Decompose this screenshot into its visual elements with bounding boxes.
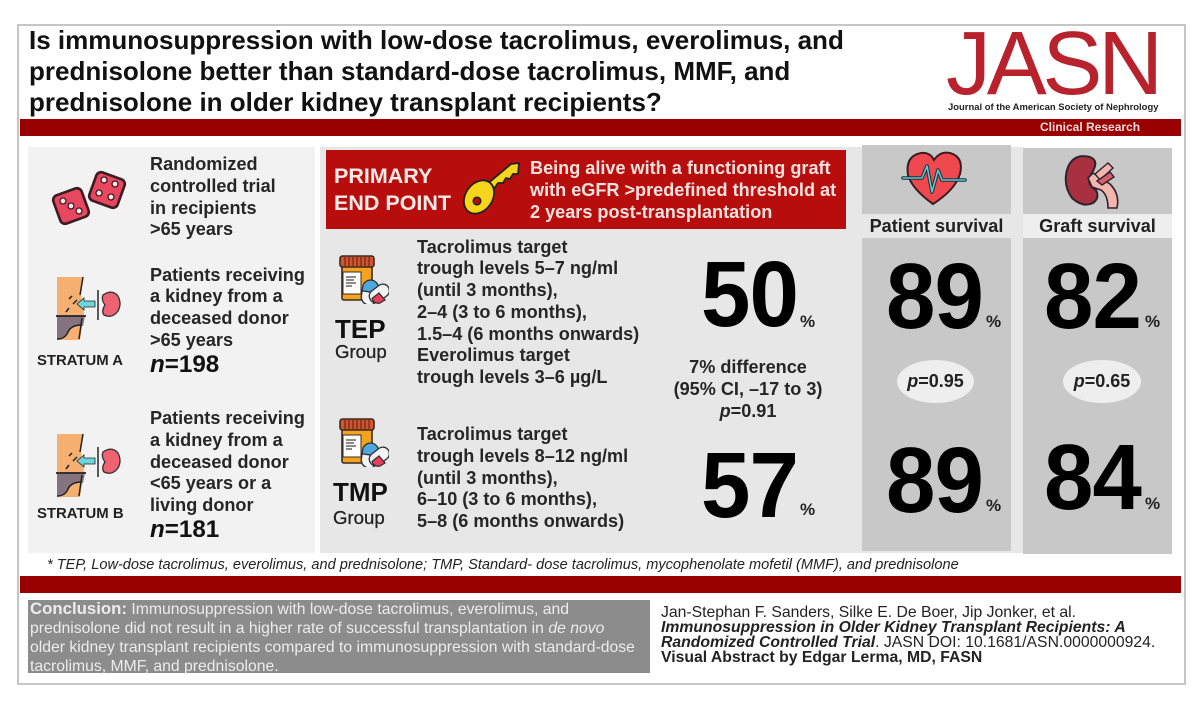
text: stratum A description: Patients receiving <box>150 264 305 284</box>
count: stratum B: n=181 <box>150 516 219 543</box>
icon: key <box>463 162 520 215</box>
stat: TMP percent sign: % <box>800 500 815 519</box>
stat: TEP primary end point: 50 <box>701 242 798 346</box>
text: TEP dosing: Everolimus target <box>417 345 570 365</box>
label: TEP group caption: Group <box>335 341 387 362</box>
panel: graft survival <box>1023 148 1172 554</box>
text: trial type: in recipients <box>150 198 257 218</box>
text: stratum B description: deceased donor <box>150 452 289 472</box>
text: conclusion: older kidney transplant recipients compared to immunosuppression with standard-dose <box>30 639 635 656</box>
text: trial type: controlled trial <box>150 176 276 196</box>
heading: primary end point: END POINT <box>334 191 451 215</box>
heading: graft survival: Graft survival <box>1039 216 1156 236</box>
text: conclusion: tacrolimus, MMF, and prednisolone. <box>30 658 279 675</box>
text: difference between groups: (95% CI, –17 to 3) <box>674 379 822 399</box>
citation: Jan-Stephan F. Sanders, Silke E. De Boer, Jip Jonker, et al. <box>661 604 1076 620</box>
text: stratum B description: living donor <box>150 495 254 515</box>
title: prednisolone in older kidney transplant recipients? <box>29 87 662 117</box>
text: TMP dosing: 6–10 (3 to 6 months), <box>417 489 597 509</box>
logo wordmark: JASN <box>946 14 1159 114</box>
citation: Immunosuppression in Older Kidney Transplant Recipients: A <box>661 618 1126 636</box>
text: stratum A description <box>150 264 305 350</box>
text: conclusion: Conclusion: Immunosuppression with low-dose tacrolimus, everolimus, and <box>30 598 569 618</box>
stat: TMP graft survival percent: % <box>1145 494 1160 513</box>
title: Is immunosuppression with low-dose tacrolimus, everolimus, and <box>29 25 844 55</box>
text: stratum A description: deceased donor <box>150 308 289 328</box>
text: end point definition: 2 years post-transplantation <box>530 202 772 222</box>
badge: patient survival p value <box>897 360 974 403</box>
text: difference between groups: 7% difference <box>689 357 807 377</box>
panel: conclusion <box>28 600 650 673</box>
text: stratum B description <box>150 408 305 515</box>
text: TEP dosing: 1.5–4 (6 months onwards) <box>417 324 639 344</box>
heading: primary end point: PRIMARY <box>334 164 432 188</box>
text: trial type <box>150 154 276 239</box>
banner label: Clinical Research <box>1040 120 1140 134</box>
stat: TEP graft survival percent: % <box>1145 312 1160 331</box>
stat: TMP patient survival: 89 <box>886 428 983 532</box>
heading: primary end point <box>334 164 451 215</box>
logo: JASN <box>946 14 1159 114</box>
stat: TEP percent sign: % <box>800 312 815 331</box>
top banner <box>20 119 1181 136</box>
text: end point definition <box>530 158 836 222</box>
count: stratum A: n=198 <box>150 351 219 378</box>
icon: kidney <box>1064 155 1118 209</box>
text: stratum B description: Patients receiving <box>150 408 305 428</box>
citation: Randomized Controlled Trial. JASN DOI: 10.1681/ASN.0000000924. <box>661 634 1155 650</box>
badge: graft survival p value <box>1063 360 1141 403</box>
text: TMP dosing: Tacrolimus target <box>417 424 567 444</box>
label: TEP group: TEP <box>335 314 386 344</box>
panel: patient survival <box>862 145 1011 551</box>
text: TMP dosing <box>417 424 628 531</box>
stat: TEP patient survival percent: % <box>986 312 1001 331</box>
text: conclusion: prednisolone did not result in a higher rate of successful transplantation in de novo <box>30 620 604 637</box>
primary end point banner <box>326 150 846 229</box>
icon: dice <box>52 170 126 226</box>
text: TEP dosing: Tacrolimus target <box>417 236 567 256</box>
logo subtitle: Journal of the American Society of Nephrology <box>948 102 1158 113</box>
text: difference between groups <box>674 357 822 421</box>
heading: patient survival: Patient survival <box>870 216 1003 236</box>
text: conclusion <box>30 598 635 675</box>
text: TEP dosing: (until 3 months), <box>417 280 558 300</box>
text: trial type: >65 years <box>150 219 233 239</box>
text: stratum A description: >65 years <box>150 330 233 350</box>
label: TMP group: TMP <box>333 477 388 507</box>
text: stratum B description: a kidney from a <box>150 430 283 450</box>
stat: TMP graft survival: 84 <box>1044 425 1141 529</box>
stat: TMP primary end point: 57 <box>701 433 798 537</box>
text: difference between groups: p=0.91 <box>720 401 776 421</box>
text: TMP dosing: trough levels 8–12 ng/ml <box>417 446 628 466</box>
text: TMP dosing: (until 3 months), <box>417 468 558 488</box>
title: prednisolone better than standard-dose tacrolimus, MMF, and <box>29 56 790 86</box>
footnote: * TEP, Low-dose tacrolimus, everolimus, and prednisolone; TMP, Standard- dose tacrolimus, mycophenolate mofetil (MMF), and prednisolone <box>47 557 959 573</box>
text: trial type: Randomized <box>150 154 258 174</box>
stat: TMP patient survival percent: % <box>986 496 1001 515</box>
citation: Visual Abstract by Edgar Lerma, MD, FASN <box>661 648 982 666</box>
text: TEP dosing: trough levels 5–7 ng/ml <box>417 258 618 278</box>
text: stratum A description: a kidney from a <box>150 286 283 306</box>
text: TEP dosing: 2–4 (3 to 6 months), <box>417 302 587 322</box>
label: stratum B: STRATUM B <box>37 506 124 522</box>
text: end point definition: with eGFR >predefined threshold at <box>530 180 836 200</box>
text: end point definition: Being alive with a functioning graft <box>530 158 831 178</box>
text: p value: p=0.95 <box>907 371 964 391</box>
stat: TEP graft survival: 82 <box>1044 244 1141 348</box>
panel: primary end point results <box>320 147 1023 553</box>
icon: heart with pulse <box>901 152 967 206</box>
icon: TEP pill bottle <box>339 255 389 304</box>
label: stratum A: STRATUM A <box>37 353 123 369</box>
stat: TEP patient survival: 89 <box>886 244 983 348</box>
text: stratum B description: <65 years or a <box>150 473 271 493</box>
panel: trial design <box>28 147 315 553</box>
text: TMP dosing: 5–8 (6 months onwards) <box>417 511 624 531</box>
text: TEP dosing: trough levels 3–6 µg/L <box>417 367 607 387</box>
text: TEP dosing <box>417 236 639 387</box>
icon: stratum B transplant <box>56 434 121 497</box>
title <box>29 25 844 117</box>
citation <box>661 604 1155 666</box>
label: TMP group caption: Group <box>333 507 385 528</box>
bottom banner <box>20 576 1181 593</box>
icon: TMP pill bottle <box>339 418 389 467</box>
text: p value: p=0.65 <box>1074 371 1130 391</box>
heading: graft survival <box>1023 214 1172 238</box>
icon: stratum A transplant <box>56 276 121 340</box>
